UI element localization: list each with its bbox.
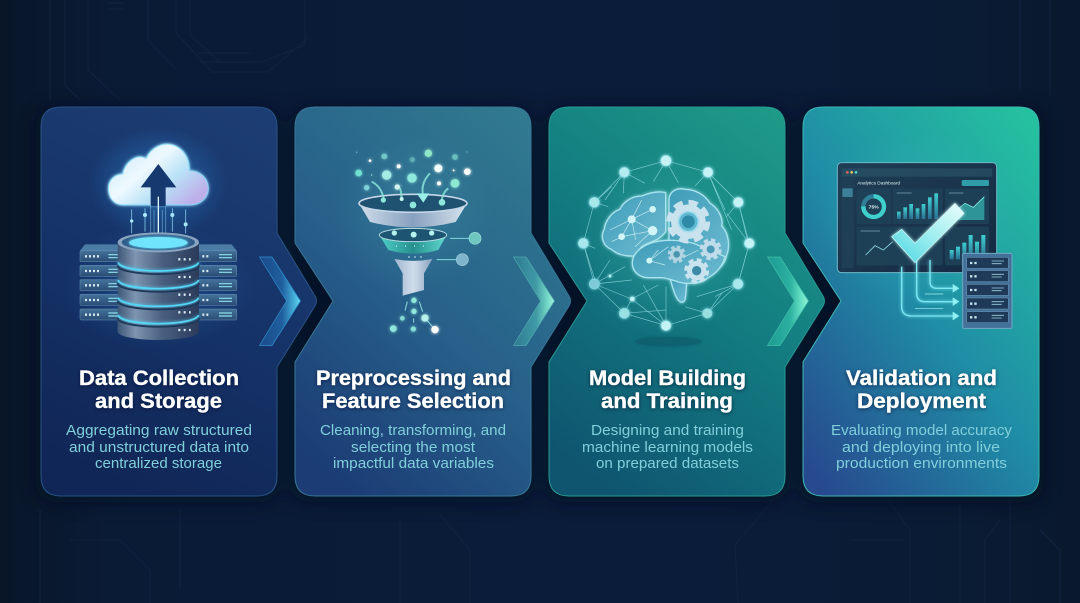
text: model building description: on prepared datasets: [596, 455, 739, 472]
icon: analytics dashboard with check mark and server: 75%: [869, 204, 879, 210]
icon: analytics dashboard with check mark and server: [817, 130, 1017, 328]
icon: cloud upload with database and servers: [62, 127, 255, 350]
icon: filtering funnel with data particles: [333, 133, 493, 333]
heading: validation: Deployment: [857, 389, 986, 413]
text: preprocessing description: selecting the most: [351, 439, 476, 456]
icon: analytics dashboard with check mark and server: Analytics Dashboard: [857, 181, 900, 186]
text: model building description: [582, 422, 753, 472]
panel: preprocessing and feature selection: [295, 107, 570, 496]
heading: model building: and Training: [601, 389, 733, 413]
text: data collection description: and unstructured data into: [69, 439, 249, 456]
heading: preprocessing: [316, 366, 511, 413]
heading: data collection: Data Collection: [79, 366, 239, 390]
heading: validation: Validation and: [846, 366, 997, 390]
heading: data collection: and Storage: [95, 389, 222, 413]
panel: model building and training: [549, 107, 824, 496]
panel: validation and deployment: [803, 107, 1039, 496]
text: model building description: Designing and training: [591, 422, 744, 439]
text: validation description: production environments: [836, 455, 1007, 472]
text: validation description: Evaluating model accuracy: [831, 422, 1012, 439]
heading: validation: [846, 366, 997, 413]
icon: neural network brain with gears: [573, 150, 759, 346]
arrow chevron 2: [514, 257, 554, 346]
heading: preprocessing: Preprocessing and: [316, 366, 511, 390]
panel: data collection and storage: [41, 107, 316, 496]
arrow chevron 1: [260, 257, 300, 346]
panel: card shadows: [36, 108, 1044, 502]
text: preprocessing description: [320, 422, 506, 472]
heading: model building: Model Building: [589, 366, 746, 390]
text: data collection description: [66, 422, 252, 472]
text: validation description: and deploying into live: [842, 439, 1000, 456]
arrow chevron 3: [768, 257, 808, 346]
text: model building description: machine learning models: [582, 439, 753, 456]
text: data collection description: Aggregating raw structured: [66, 422, 252, 439]
heading: preprocessing: Feature Selection: [322, 389, 504, 413]
heading: data collection: [79, 366, 239, 413]
text: data collection description: centralized storage: [95, 455, 222, 472]
text: validation description: [831, 422, 1012, 472]
heading: model building: [589, 366, 746, 413]
text: preprocessing description: impactful data variables: [333, 455, 494, 472]
text: preprocessing description: Cleaning, transforming, and: [320, 422, 506, 439]
